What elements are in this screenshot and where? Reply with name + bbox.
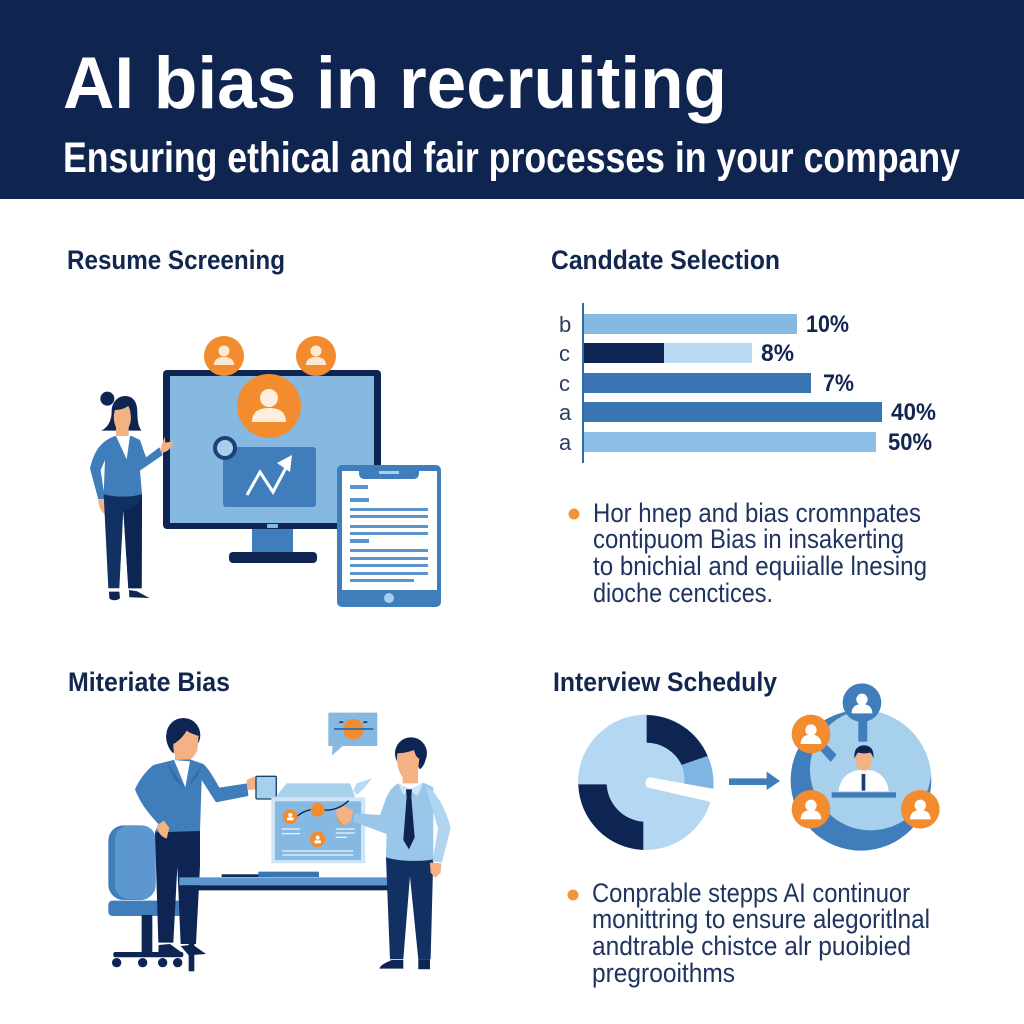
icon: monitor (163, 370, 381, 563)
bar row: a 50% (559, 429, 932, 456)
text block: monitoring note: pregrooithms (592, 958, 735, 988)
icon: orange user bottom right (901, 790, 940, 829)
text block: monitoring note: monittring to ensure alegoritlnal (592, 904, 930, 934)
title: AI bias in recruiting (63, 43, 727, 124)
icon: small orange user right (296, 336, 336, 376)
bar row: b 10%: 10% (806, 311, 849, 338)
bar row: c 7%: 7% (823, 370, 854, 397)
bar row: a 50%: a (559, 430, 572, 455)
icon: orange user top left (792, 715, 830, 753)
text block: bias note: to bnichial and equiialle lnesing (593, 551, 927, 581)
figure: standing man left (135, 718, 256, 955)
text block: monitoring note: andtrable chistce alr puoibied (592, 931, 911, 961)
bar row: a 40% (559, 399, 936, 426)
icon: blue user (843, 683, 881, 722)
icon: desk (179, 872, 389, 971)
person at desk (832, 745, 896, 798)
text block: monitoring note: Conprable stepps AI continuor (592, 878, 910, 908)
text block: bias note: dioche cenctices. (593, 578, 773, 608)
arrow (729, 772, 780, 790)
illustration: interview scheduling (578, 683, 940, 851)
icon: presentation screen (271, 778, 372, 863)
text block: bias note: Hor hnep and bias cromnpates (593, 498, 921, 528)
icon: large orange user (237, 374, 301, 438)
pie chart (578, 715, 717, 850)
bar row: c 8% (559, 340, 794, 367)
icon: orange user bottom left (792, 790, 830, 829)
header banner (0, 0, 1024, 199)
icon: speech bubble (328, 713, 377, 755)
icon: office chair (108, 825, 183, 967)
figure: woman presenting (90, 392, 173, 600)
network diagram (791, 683, 940, 851)
bar chart (559, 303, 936, 463)
bar row: a 40%: a (559, 400, 572, 425)
bar row: c 7% (559, 370, 854, 397)
icon: resume tablet (337, 465, 441, 607)
bar row: a 40%: 40% (891, 399, 936, 426)
heading: mitigate bias: Miteriate Bias (68, 667, 230, 697)
heading: interview scheduling: Interview Scheduly (553, 667, 777, 697)
bar row: a 50%: 50% (888, 429, 932, 456)
bar row: c 7%: c (559, 371, 570, 396)
figure: standing man right (336, 737, 451, 969)
icon: growth chart card (215, 438, 316, 507)
text block: bias note: contipuom Bias in insakerting (593, 524, 904, 554)
chart axis (582, 303, 584, 463)
icon: handheld tablet (256, 776, 276, 799)
text block: bias note (568, 498, 927, 608)
heading: candidate selection: Canddate Selection (551, 245, 780, 275)
bar row: c 8%: 8% (761, 340, 794, 367)
bar row: b 10%: b (559, 312, 571, 337)
text block: monitoring note (568, 878, 930, 988)
bar row: b 10% (559, 311, 849, 338)
icon: small orange user left (204, 336, 244, 376)
heading: resume screening: Resume Screening (67, 245, 285, 275)
illustration: mitigate bias (108, 713, 451, 971)
illustration: resume screening (90, 336, 441, 607)
bar row: c 8%: c (559, 341, 570, 366)
